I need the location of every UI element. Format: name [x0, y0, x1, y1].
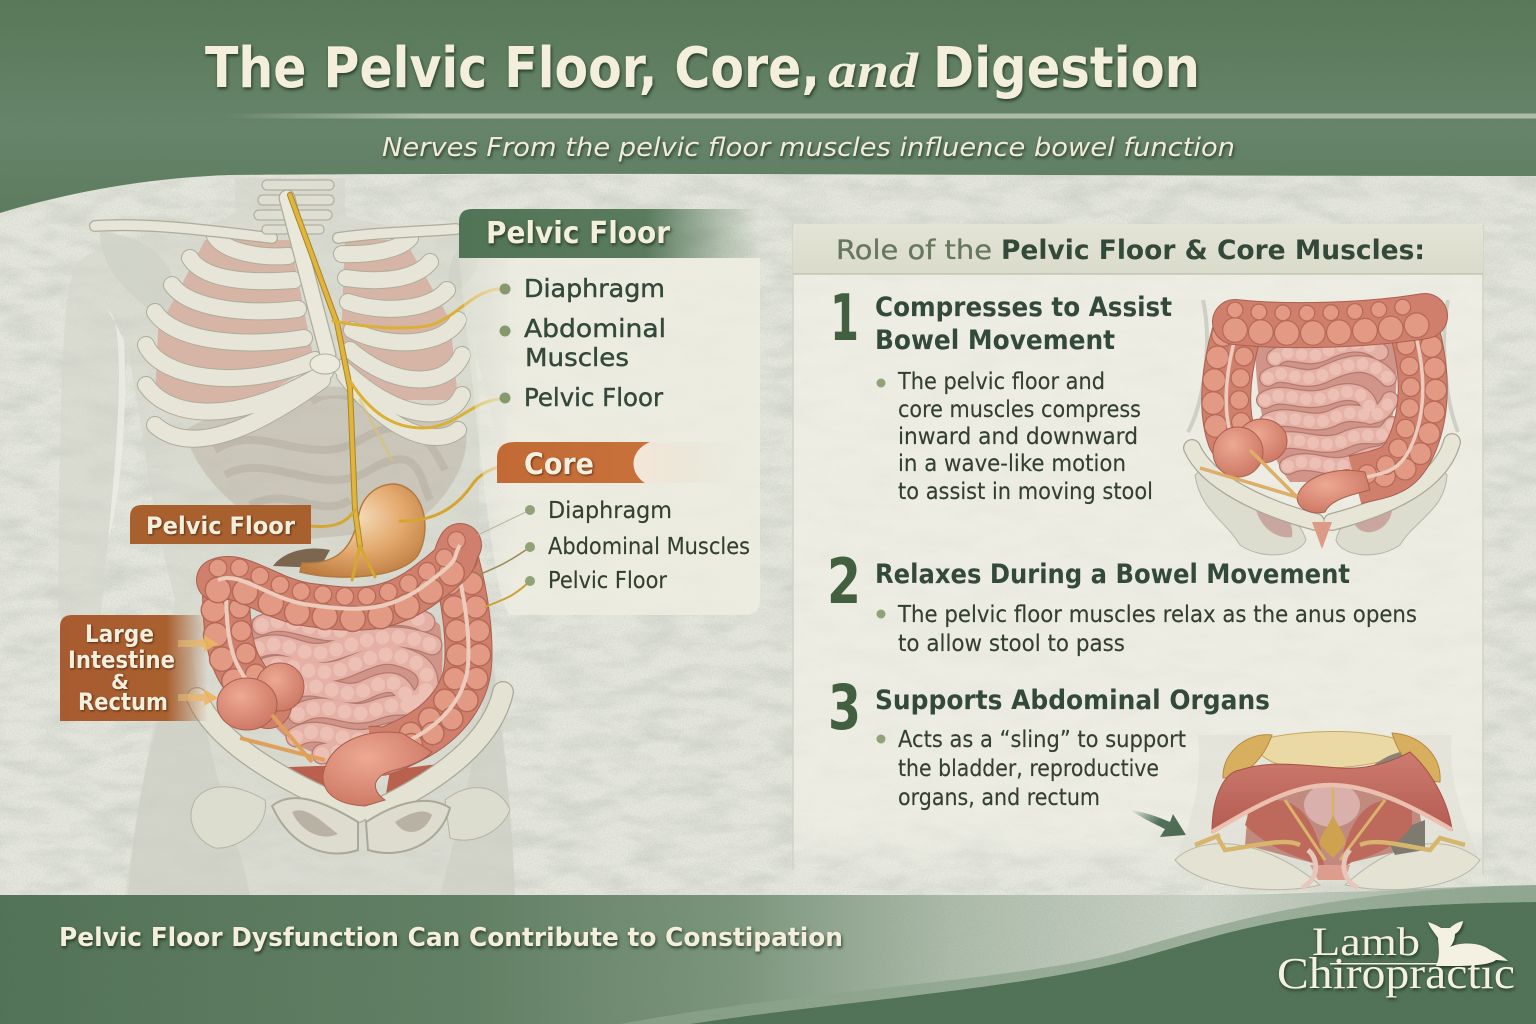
icon: lamb: [1428, 921, 1508, 966]
pelvic floor list: Abdominal: [524, 314, 666, 343]
pelvic floor list: [500, 274, 666, 412]
item 1: 1: [830, 282, 859, 356]
shoulder shading: [100, 232, 481, 325]
footer dark swoosh: [690, 902, 1536, 1024]
pelvis behind colon: [191, 692, 510, 854]
core heading: Core: [524, 447, 594, 481]
item 2: to allow stool to pass: [898, 631, 1125, 657]
clavicles: [95, 225, 456, 238]
item 2: The pelvic floor muscles relax as the anus opens: [897, 602, 1417, 628]
footer swoosh highlight: [620, 884, 1536, 1024]
panel: pelvic floor and core list: [459, 209, 760, 615]
core heading: [497, 442, 745, 483]
ribs: [146, 236, 462, 439]
illustration: faded torso with skeleton: [58, 178, 515, 895]
transverse colon: [218, 533, 460, 619]
item 3: Supports Abdominal Organs: [875, 685, 1270, 716]
pelvic floor heading: Pelvic Floor: [486, 216, 670, 251]
panel: role of the pelvic floor and core muscles: [793, 224, 1483, 892]
label: large intestine and rectum tag: Rectum: [78, 688, 168, 716]
arm shading: [108, 310, 125, 540]
cecum: [217, 663, 325, 762]
item 2: [827, 545, 1417, 657]
logo: Lamb Chiropractic: Chiropractic: [1277, 949, 1515, 998]
body silhouette: [58, 178, 515, 895]
ascending colon: [213, 585, 281, 705]
footer message: Pelvic Floor Dysfunction Can Contribute to Constipation: [59, 923, 843, 953]
label: large intestine and rectum tag: &: [111, 670, 129, 694]
label: large intestine and rectum tag: Large: [85, 620, 154, 648]
item 1: [830, 282, 1172, 505]
intercostal muscles: [155, 240, 315, 420]
title: The Pelvic Floor, Core,: [205, 36, 820, 101]
pelvic floor list: Diaphragm: [524, 274, 665, 303]
card background: [459, 258, 760, 615]
card background: [793, 224, 1483, 889]
core list: Pelvic Floor: [548, 568, 667, 594]
item 3: organs, and rectum: [898, 785, 1100, 811]
item 1: inward and downward: [898, 424, 1138, 450]
header divider line: [225, 114, 1536, 118]
item 1: core muscles compress: [898, 397, 1141, 423]
rectum: [323, 732, 432, 806]
logo: Lamb Chiropractic: [1277, 919, 1515, 998]
illustration: intestines in pelvis: [1188, 300, 1458, 555]
sternum: [287, 198, 328, 355]
descending colon: [361, 560, 479, 752]
pelvic floor list: Muscles: [525, 343, 629, 372]
thin nerve leaders: [478, 510, 530, 607]
core list: Diaphragm: [548, 498, 672, 524]
lower body shading: [128, 640, 515, 895]
label: large intestine and rectum tag: [60, 615, 218, 721]
header band background: [0, 0, 1536, 215]
arrows to the colon: [178, 635, 218, 706]
item 1: in a wave-like motion: [898, 451, 1126, 477]
core list: [525, 498, 750, 594]
item 3: [828, 671, 1270, 811]
stomach: [273, 484, 425, 577]
item 1: The pelvic floor and: [897, 369, 1105, 395]
main light panel: [0, 174, 1536, 895]
label: pelvic floor tag: [130, 505, 311, 544]
label: large intestine and rectum tag: Intestine: [68, 646, 175, 674]
abdomen organs ghosted: [185, 393, 466, 540]
nerve pathways: [290, 195, 525, 580]
item 2: Relaxes During a Bowel Movement: [875, 559, 1350, 590]
small intestine: [250, 600, 443, 760]
pelvic floor list: Pelvic Floor: [524, 383, 664, 412]
role heading: [793, 224, 1483, 274]
item 1: Bowel Movement: [875, 325, 1115, 356]
title: and: [828, 42, 919, 98]
illustration: pelvic floor sling: [1175, 732, 1480, 892]
item 1: to assist in moving stool: [898, 479, 1153, 505]
spine vertebrae: [254, 180, 334, 234]
core list: Abdominal Muscles: [548, 534, 750, 560]
ribs outline: [146, 236, 462, 439]
logo: Lamb Chiropractic: Lamb: [1312, 919, 1420, 964]
large intestine and rectum: [213, 533, 479, 806]
arrow to pelvic sling: [1130, 810, 1186, 837]
item 3: 3: [828, 671, 861, 744]
item 3: Acts as a “sling” to support: [898, 727, 1186, 753]
title: Digestion: [933, 36, 1200, 101]
role heading: Pelvic Floor & Core Muscles:: [1001, 235, 1425, 266]
pelvic floor heading: [459, 209, 760, 258]
footer band background: [0, 880, 1536, 1024]
item 2: 2: [827, 545, 861, 618]
role heading: Role of the: [836, 235, 992, 266]
label: pelvic floor tag: Pelvic Floor: [146, 512, 295, 540]
item 3: the bladder, reproductive: [898, 756, 1159, 782]
subtitle: Nerves From the pelvic floor muscles influence bowel function: [382, 133, 1235, 163]
item 1: Compresses to Assist: [875, 292, 1172, 323]
